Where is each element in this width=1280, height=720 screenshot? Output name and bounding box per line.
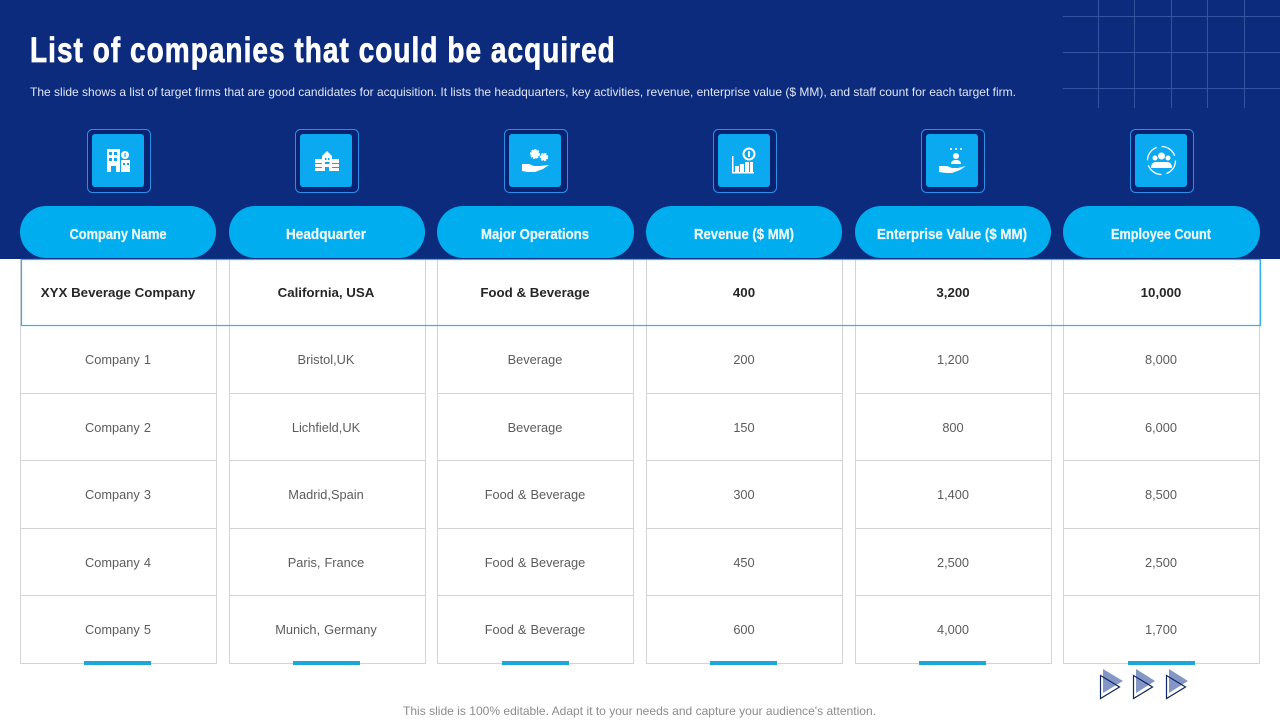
column header: Revenue: Revenue ($ MM) xyxy=(694,226,794,243)
row: Company 1 xyxy=(85,352,1177,367)
column header: Major Operations xyxy=(437,206,634,258)
icon: company buildings xyxy=(88,130,150,192)
row: Company 1: 200 xyxy=(733,352,755,367)
row: Company 4 xyxy=(85,555,1177,570)
row: Company 5: Company 5 xyxy=(85,622,151,637)
column header: Company Name xyxy=(20,206,216,258)
row: Company 3: Company 3 xyxy=(85,487,151,502)
icon: revenue chart with gear xyxy=(714,130,776,192)
row: XYX Beverage Company: XYX Beverage Company xyxy=(41,285,196,300)
row: Company 2: Company 2 xyxy=(85,420,151,435)
row: Company 4: 2,500 xyxy=(1145,555,1177,570)
column header: Enterprise Value xyxy=(855,206,1051,258)
column header: Headquarter xyxy=(229,206,425,258)
row: Company 3: 8,500 xyxy=(1145,487,1177,502)
row: Company 5: 4,000 xyxy=(937,622,969,637)
column header: Enterprise Value: Enterprise Value ($ MM) xyxy=(877,226,1027,243)
column header: Employee Count xyxy=(1063,206,1260,258)
column header: Employee Count: Employee Count xyxy=(1111,226,1211,243)
column header: Headquarter: Headquarter xyxy=(286,226,366,243)
row: Company 1: Company 1 xyxy=(85,352,151,367)
row: Company 3 xyxy=(85,487,1177,502)
icon: headquarters xyxy=(296,130,358,192)
row: Company 4: 450 xyxy=(733,555,755,570)
subtitle: The slide shows a list of target firms that are good candidates for acquisition. It lists the headquarters, key activities, revenue, enterprise value ($ MM), and staff count for each target firm. xyxy=(30,85,1016,99)
row: XYX Beverage Company: California, USA xyxy=(278,285,375,300)
row: Company 5: 600 xyxy=(733,622,755,637)
row: Company 2: 150 xyxy=(733,420,755,435)
row: Company 3: 300 xyxy=(733,487,755,502)
row: Company 4: Paris, France xyxy=(288,555,364,570)
row: Company 2: Lichfield,UK xyxy=(292,420,361,435)
arrows: three play triangles xyxy=(1100,669,1188,698)
row: XYX Beverage Company xyxy=(41,285,1181,300)
row: Company 2 xyxy=(85,420,1177,435)
header band xyxy=(0,0,1280,259)
row: Company 4: 2,500 xyxy=(937,555,969,570)
row: XYX Beverage Company: Food & Beverage xyxy=(480,285,590,300)
row: Company 5: Food & Beverage xyxy=(485,622,585,637)
row: XYX Beverage Company: 400 xyxy=(733,285,755,300)
row: Company 1: Beverage xyxy=(508,352,562,367)
row: Company 1: 1,200 xyxy=(937,352,969,367)
column accent bars xyxy=(84,661,1195,665)
row: XYX Beverage Company: 3,200 xyxy=(936,285,970,300)
row: Company 2: 800 xyxy=(942,420,964,435)
row: XYX Beverage Company: 10,000 xyxy=(1141,285,1181,300)
icon: enterprise value hand xyxy=(922,130,984,192)
row: Company 2: 6,000 xyxy=(1145,420,1177,435)
table body cells xyxy=(20,260,1260,664)
column header: Company Name: Company Name xyxy=(70,226,166,243)
highlighted row outline xyxy=(22,260,1260,326)
row: Company 1: Bristol,UK xyxy=(298,352,355,367)
row: Company 4: Company 4 xyxy=(85,555,151,570)
row: Company 4: Food & Beverage xyxy=(485,555,585,570)
column header: Revenue xyxy=(646,206,842,258)
row: Company 5: 1,700 xyxy=(1145,622,1177,637)
footer note: This slide is 100% editable. Adapt it to your needs and capture your audience's attention. xyxy=(403,704,876,718)
column header: Major Operations: Major Operations xyxy=(481,226,589,243)
row: Company 2: Beverage xyxy=(508,420,562,435)
row: Company 3: 1,400 xyxy=(937,487,969,502)
icon: hand with gears xyxy=(504,130,568,192)
title: List of companies that could be acquired xyxy=(30,30,615,70)
row: Company 3: Madrid,Spain xyxy=(288,487,364,502)
row: Company 1: 8,000 xyxy=(1145,352,1177,367)
icon: employee group xyxy=(1130,130,1194,192)
row: Company 5 xyxy=(85,622,1177,637)
row: Company 5: Munich, Germany xyxy=(275,622,377,637)
row: Company 3: Food & Beverage xyxy=(485,487,585,502)
